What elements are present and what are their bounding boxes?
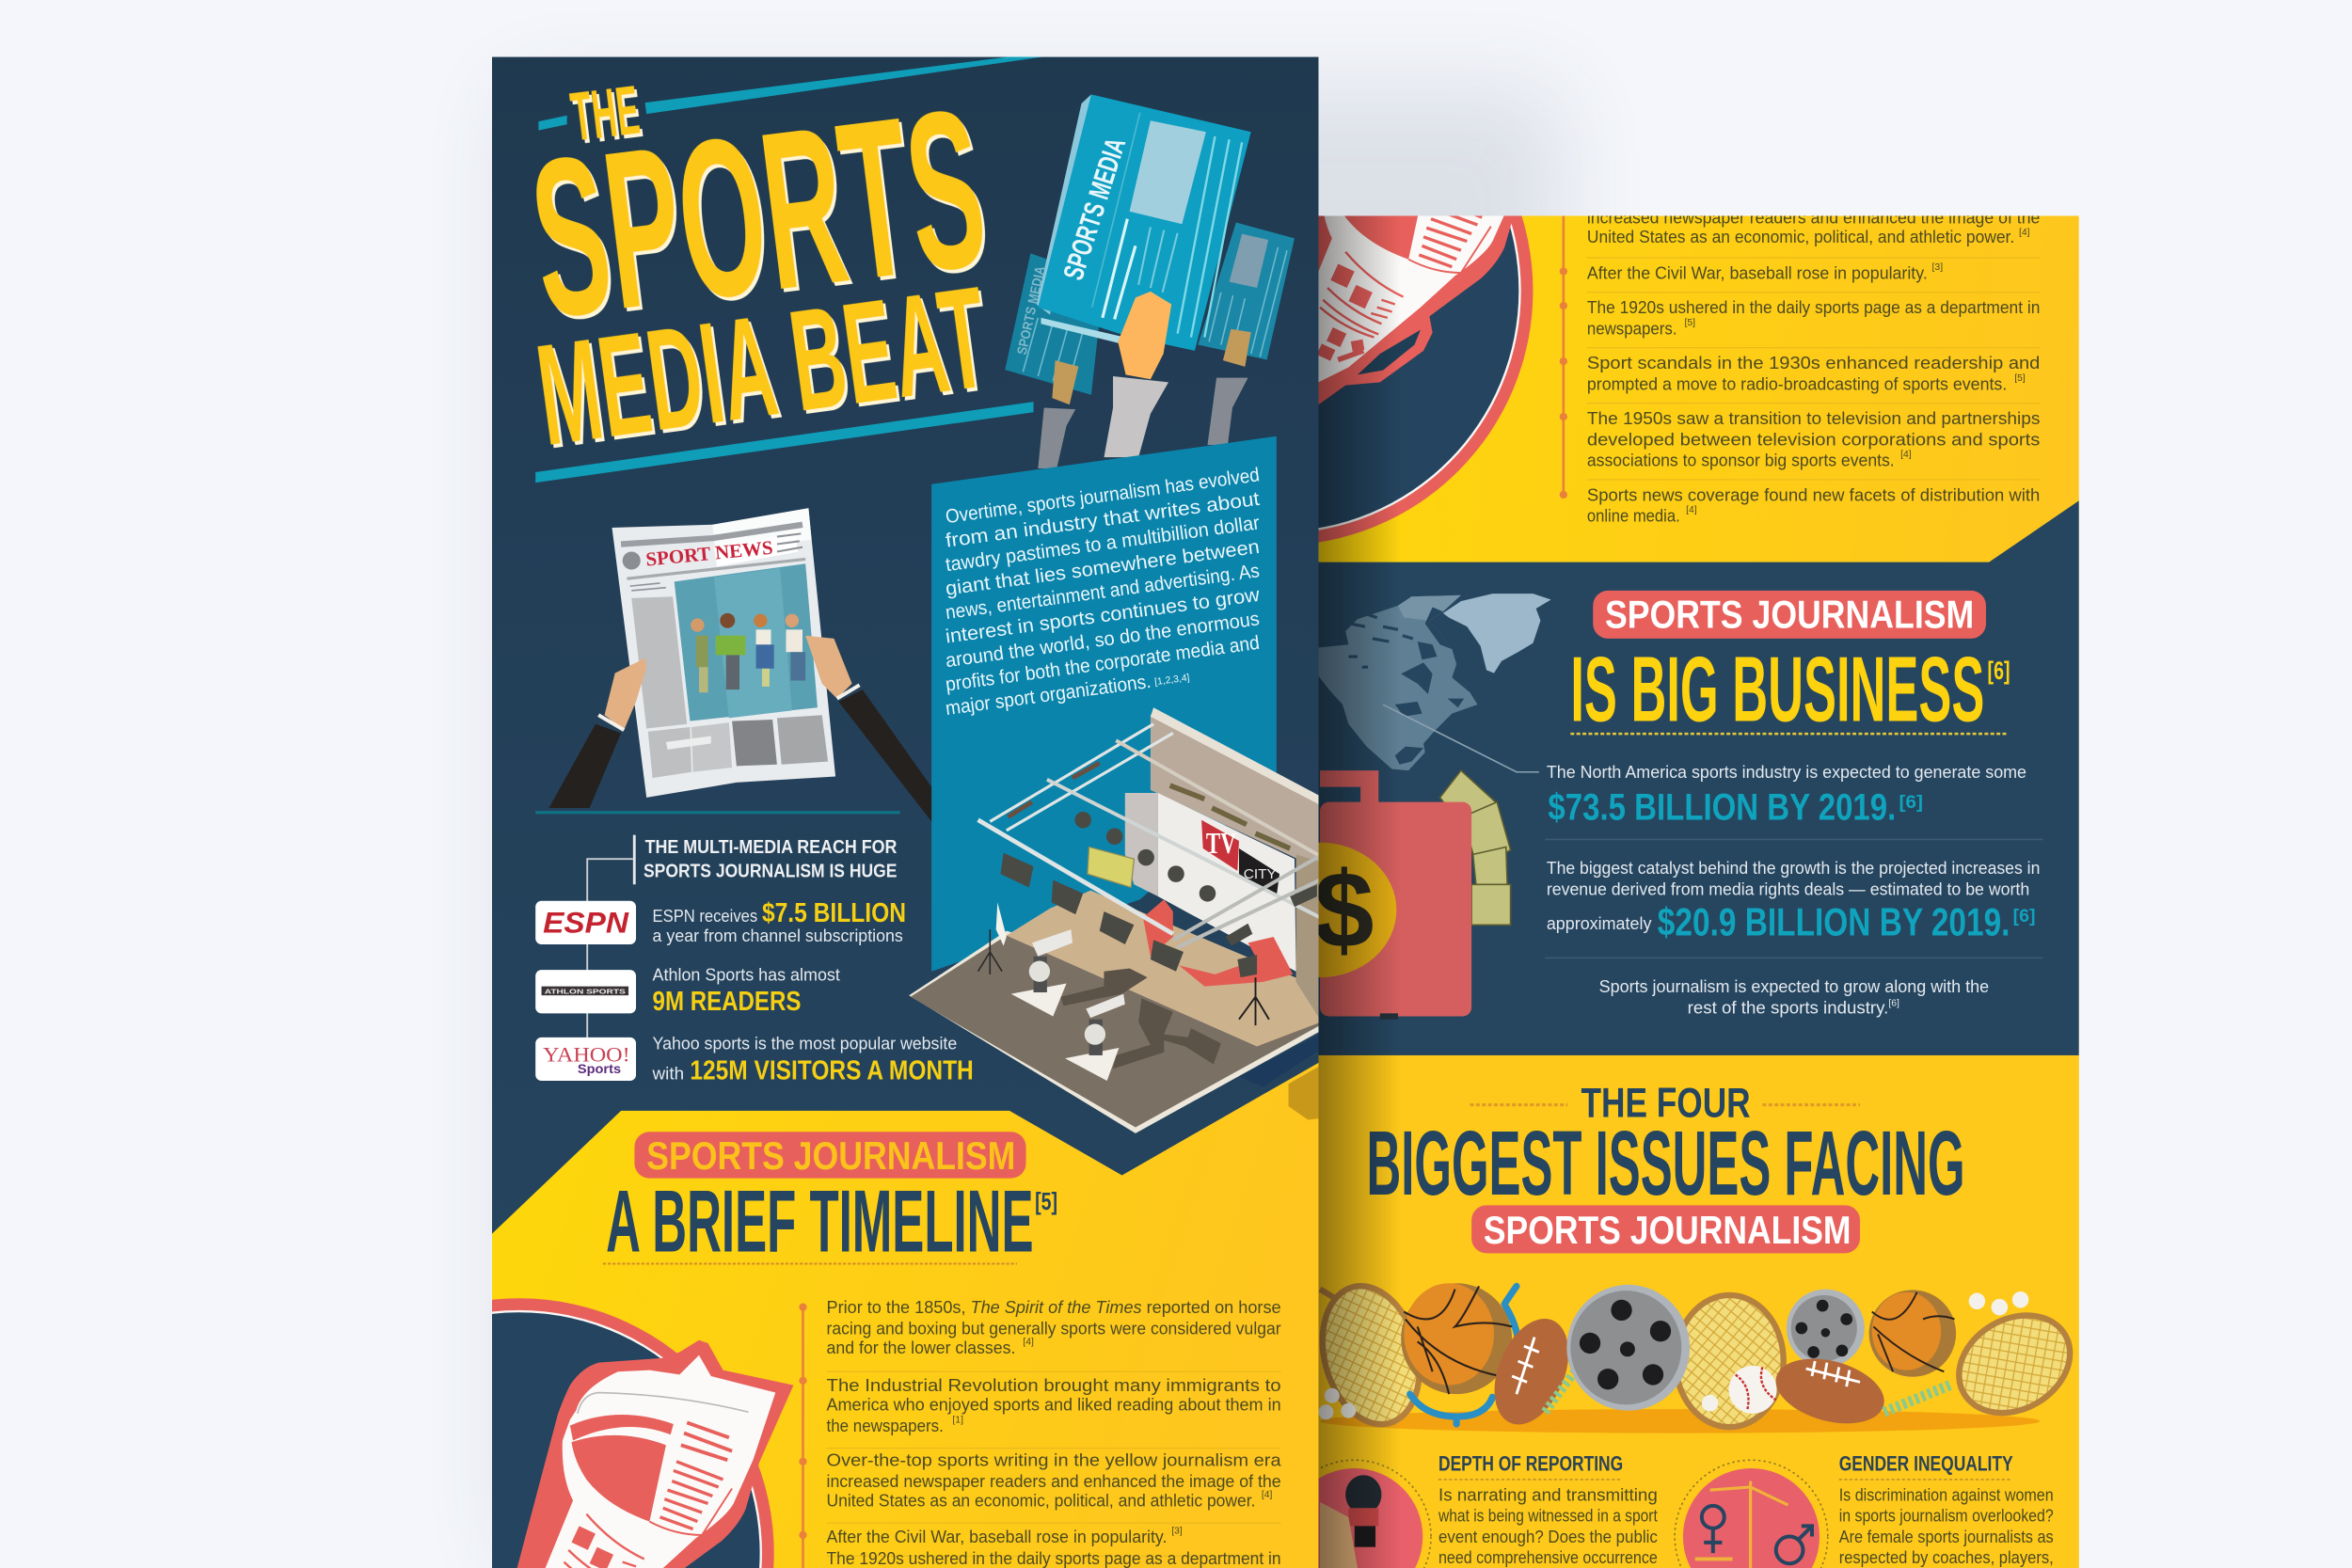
decorative teal title bars xyxy=(535,57,1042,483)
stat: Athlon Sports xyxy=(535,964,840,1017)
timeline text: racing and boxing but generally sports were considered vulgar xyxy=(827,1318,1281,1338)
stat: ESPN: ESPN receives xyxy=(653,906,757,926)
paper: SPORT NEWS xyxy=(645,538,774,571)
timeline continuation: text: online media. xyxy=(1587,506,1680,526)
heading: a brief timeline: [5] xyxy=(1035,1189,1057,1215)
camera two xyxy=(1065,994,1125,1081)
TV City sign: TV xyxy=(1206,827,1236,860)
panel: intro teal block xyxy=(931,436,1277,972)
arm left xyxy=(549,724,621,808)
timeline continuation: text: prompted a move to radio-broadcasting of sports events. xyxy=(1587,373,2007,393)
timeline text: The Industrial Revolution brought many immigrants to xyxy=(827,1375,1281,1395)
stage lights xyxy=(1000,812,1317,977)
icon: hands holding sports media newspapers xyxy=(1005,94,1295,468)
timeline circle with rolled newspaper xyxy=(480,1298,793,1568)
icons: sports equipment row xyxy=(1308,1275,2088,1435)
text: intro paragraph xyxy=(945,464,1262,720)
icon: isometric TV studio xyxy=(909,707,1320,1133)
stat: ESPN: a year from channel subscriptions xyxy=(653,926,903,945)
text: media rights stat: The biggest catalyst behind the growth is the projected increases in xyxy=(1547,858,2040,878)
timeline text: Prior to the 1850s, The Spirit of the Times reported on horse xyxy=(827,1297,1281,1317)
panel: depth of reporting: DEPTH OF REPORTING xyxy=(1438,1451,1623,1475)
timeline continuation: circle with rolled newspaper xyxy=(1318,216,1534,543)
timeline continuation: text xyxy=(1587,207,2040,526)
heading: multi-media reach xyxy=(587,835,897,1065)
panel: gender inequality: GENDER INEQUALITY xyxy=(1839,1451,2013,1475)
text: intro paragraph: from an industry that writes about xyxy=(945,488,1261,552)
text: growth note xyxy=(1599,976,1989,1017)
heading: a brief timeline: A BRIEF TIMELINE xyxy=(606,1172,1034,1271)
icon: briefcase with money xyxy=(1319,769,1511,1020)
timeline text: and for the lower classes. xyxy=(827,1338,1015,1357)
text: growth note: Sports journalism is expected to grow along with the xyxy=(1599,976,1989,996)
timeline continuation: text: newspapers. xyxy=(1587,318,1677,338)
text: growth note: [6] xyxy=(1888,998,1899,1008)
arm center xyxy=(1104,292,1171,457)
panel: right sheet (continuation of the infographic) xyxy=(1318,216,2079,1568)
panel: depth of reporting: need comprehensive occurrence xyxy=(1438,1547,1658,1567)
divider xyxy=(535,811,900,814)
panel: gender inequality: in sports journalism overlooked? xyxy=(1839,1506,2054,1526)
icon: tennis racket left xyxy=(1319,1283,1422,1428)
studio floor xyxy=(909,891,1320,1133)
icon: shuttlecocks xyxy=(1318,1291,2028,1419)
title: MEDIA BEAT xyxy=(529,257,996,476)
timeline continuation: text: associations to sponsor big sports events. xyxy=(1587,451,1895,470)
text: North America stat: [6] xyxy=(1899,793,1923,813)
timeline text: The 1920s ushered in the daily sports page as a department in xyxy=(827,1548,1281,1568)
timeline line and bullets xyxy=(799,1304,807,1568)
heading: sports journalism pill: SPORTS JOURNALISM xyxy=(646,1133,1015,1178)
panel: timeline yellow section xyxy=(492,1063,1318,1568)
side newspaper right xyxy=(1198,223,1295,359)
panel: depth of reporting: Is narrating and transmitting xyxy=(1438,1484,1658,1504)
icon: scales with gender symbols xyxy=(1675,1460,1828,1568)
timeline continuation: text: [4] xyxy=(2019,228,2030,238)
timeline text: the newspapers. xyxy=(827,1416,944,1435)
front newspaper: SPORTS MEDIA xyxy=(1058,135,1132,284)
shadow cast by left sheet xyxy=(1318,215,1401,1568)
TV City sign xyxy=(1201,820,1279,896)
icon: film reel small xyxy=(1787,1290,1865,1367)
text: intro paragraph: news, entertainment and advertising. As xyxy=(945,560,1261,624)
timeline continuation: text: Sports news coverage found new facets of distribution with xyxy=(1587,484,2040,504)
icon: basketball left xyxy=(1401,1283,1512,1394)
panel: depth of reporting xyxy=(1278,1451,1658,1568)
stat: Athlon Sports: 9M READERS xyxy=(653,987,801,1017)
tripod light right xyxy=(1239,977,1269,1025)
panel: gender inequality xyxy=(1675,1451,2054,1568)
timeline continuation: text: The 1920s ushered in the daily sports page as a department in xyxy=(1587,297,2040,317)
text: intro paragraph: profits for both the corporate media and xyxy=(945,632,1261,696)
icon: film reel large xyxy=(1566,1285,1690,1411)
text: intro paragraph: [1,2,3,4] xyxy=(1154,673,1190,688)
timeline continuation: text: Sport scandals in the 1930s enhanced readership and xyxy=(1587,353,2040,372)
timeline continuation: text: [3] xyxy=(1932,262,1943,273)
title: SPORTS xyxy=(519,61,997,365)
monitor xyxy=(1088,847,1134,887)
figures in photo xyxy=(691,613,805,692)
panel: gender inequality: respected by coaches, players, xyxy=(1839,1547,2054,1567)
icon: rolled newspaper xyxy=(480,1340,793,1568)
stat: Yahoo Sports: 125M VISITORS A MONTH xyxy=(690,1055,974,1085)
stat: Athlon Sports: Athlon Sports has almost xyxy=(653,964,840,984)
icon: football right xyxy=(1769,1348,1891,1434)
text: media rights stat: [6] xyxy=(2013,907,2036,927)
panel: gender inequality: Is discrimination against women xyxy=(1839,1484,2054,1504)
timeline text: Over-the-top sports writing in the yellow journalism era xyxy=(827,1450,1281,1470)
text: media rights stat: approximately xyxy=(1547,913,1652,933)
icon: North America map xyxy=(1318,594,1551,772)
timeline text: [4] xyxy=(1023,1338,1034,1348)
text: media rights stat xyxy=(1547,862,2040,939)
stat: Athlon Sports: ATHLON SPORTS xyxy=(545,989,626,996)
timeline continuation: text: increased newspaper readers and enhanced the image of the xyxy=(1587,207,2040,227)
timeline continuation: text: [4] xyxy=(1900,450,1912,460)
timeline continuation: text: [4] xyxy=(1686,505,1697,515)
icon: hands holding sport news newspaper xyxy=(549,508,931,821)
timeline continuation: text: developed between television corporations and sports xyxy=(1587,429,2040,449)
panel: depth of reporting: what is being witnessed in a sport xyxy=(1438,1506,1658,1526)
text: media rights stat: $20.9 BILLION BY 2019. xyxy=(1658,899,2010,943)
timeline continuation: text: [5] xyxy=(1684,318,1695,328)
arm right xyxy=(838,689,931,821)
icon: blue stand xyxy=(1410,1286,1519,1424)
text: intro paragraph: around the world, so do the enormous xyxy=(945,608,1261,672)
stat: ESPN: ESPN xyxy=(543,905,629,939)
camera one xyxy=(1011,929,1073,1017)
timeline continuation: text: The 1950s saw a transition to television and partnerships xyxy=(1587,408,2040,428)
icon: football left xyxy=(1494,1319,1568,1424)
panel: gender inequality: Are female sports journalists as xyxy=(1839,1527,2054,1546)
heading: is big business: [6] xyxy=(1988,656,2010,685)
text: growth note: rest of the sports industry. xyxy=(1688,997,1888,1017)
stat: ESPN: $7.5 BILLION xyxy=(762,898,906,928)
text: intro paragraph: Overtime, sports journalism has evolved xyxy=(945,464,1261,528)
text: intro paragraph: interest in sports continues to grow xyxy=(945,584,1262,648)
floor shadows xyxy=(1060,969,1221,1069)
text: media rights stat: revenue derived from media rights deals — estimated to be worth xyxy=(1547,879,2029,898)
text: intro paragraph: tawdry pastimes to a multibillion dollar xyxy=(945,512,1261,576)
heading: is big business: IS BIG BUSINESS xyxy=(1570,638,1984,741)
heading: sports journalism pill: SPORTS JOURNALISM xyxy=(1605,593,1974,637)
arm right xyxy=(1207,329,1251,445)
infographic mockup: two overlapping sheets xyxy=(492,56,2079,1568)
lighting rig xyxy=(978,724,1320,947)
side newspaper left: SPORTS MEDIA xyxy=(1015,265,1048,356)
icon: rolled newspaper xyxy=(1318,216,1511,404)
paper xyxy=(612,508,835,798)
heading: the four biggest issues: THE FOUR xyxy=(1581,1080,1751,1126)
timeline text: [3] xyxy=(1171,1526,1183,1536)
icon: basketball right xyxy=(1869,1290,1956,1377)
stat: Yahoo Sports: YAHOO! xyxy=(543,1042,630,1066)
icon: baseball xyxy=(1729,1366,1777,1414)
stat: Yahoo Sports xyxy=(535,1034,974,1085)
timeline text: [1] xyxy=(952,1415,963,1425)
text: North America stat: The North America sports industry is expected to generate some xyxy=(1547,762,2026,782)
panel: four biggest issues yellow section xyxy=(1251,1055,2079,1568)
umbrella light with tripod xyxy=(978,902,1007,974)
darker navy floor shadow xyxy=(1239,1035,1320,1086)
timeline text: After the Civil War, baseball rose in popularity. xyxy=(827,1527,1167,1546)
heading: the four biggest issues: SPORTS JOURNALISM xyxy=(1484,1208,1851,1252)
red studio set xyxy=(1143,899,1293,987)
timeline continuation: text: United States as an economic, political, and athletic power. xyxy=(1587,227,2014,246)
text: intro paragraph: giant that lies somewhere between xyxy=(945,536,1261,600)
soft drop shadows behind sheets xyxy=(510,90,1560,1559)
panel: big business navy section xyxy=(1251,500,2079,1055)
hand left xyxy=(598,658,646,730)
icon: briefcase with money: $ xyxy=(1314,850,1375,971)
icon: microphone in circle xyxy=(1278,1460,1431,1568)
title: THE xyxy=(567,71,644,156)
timeline text: [4] xyxy=(1262,1490,1273,1500)
heading: the four biggest issues xyxy=(1366,1080,1965,1253)
hand right xyxy=(805,636,860,699)
icon: racket grip xyxy=(1545,1367,1578,1412)
heading: a brief timeline xyxy=(603,1172,1057,1271)
text: intro paragraph: major sport organizations. xyxy=(945,671,1152,720)
heading: is big business xyxy=(1570,657,2010,736)
wall lights xyxy=(1170,785,1290,848)
stat: ESPN xyxy=(535,898,906,945)
front newspaper xyxy=(1037,94,1251,351)
arm left xyxy=(1038,360,1078,468)
icon: racket right xyxy=(1884,1296,2088,1433)
timeline continuation: text: [5] xyxy=(2014,373,2026,384)
panel: depth of reporting: event enough? Does the public xyxy=(1438,1527,1658,1546)
side newspaper left xyxy=(1005,253,1104,395)
timeline text: America who enjoyed sports and liked reading about them in xyxy=(827,1395,1281,1415)
timeline continuation: text: After the Civil War, baseball rose in popularity. xyxy=(1587,262,1928,282)
text: North America stat: $73.5 BILLION BY 2019. xyxy=(1548,787,1896,829)
title xyxy=(519,61,997,476)
stat: Yahoo Sports: Yahoo sports is the most popular website xyxy=(653,1034,957,1053)
heading: multi-media reach: THE MULTI-MEDIA REACH FOR xyxy=(645,837,897,858)
panel: left sheet xyxy=(480,57,1320,1568)
timeline continuation: line and bullets xyxy=(1560,215,1567,499)
gold crate xyxy=(1289,1066,1320,1119)
timeline text: United States as an economic, political, and athletic power. xyxy=(827,1491,1256,1511)
stat: Yahoo Sports: with xyxy=(652,1063,684,1083)
heading: multi-media reach: SPORTS JOURNALISM IS HUGE xyxy=(644,861,897,881)
stat: Yahoo Sports: Sports xyxy=(578,1062,621,1076)
studio walls xyxy=(1125,707,1320,1020)
timeline text: increased newspaper readers and enhanced the image of the xyxy=(827,1471,1281,1491)
text: North America stat xyxy=(1547,766,2026,822)
TV City sign: CITY xyxy=(1244,867,1277,882)
timeline text xyxy=(827,1297,1281,1568)
icon: tennis racket center xyxy=(1676,1295,1784,1427)
